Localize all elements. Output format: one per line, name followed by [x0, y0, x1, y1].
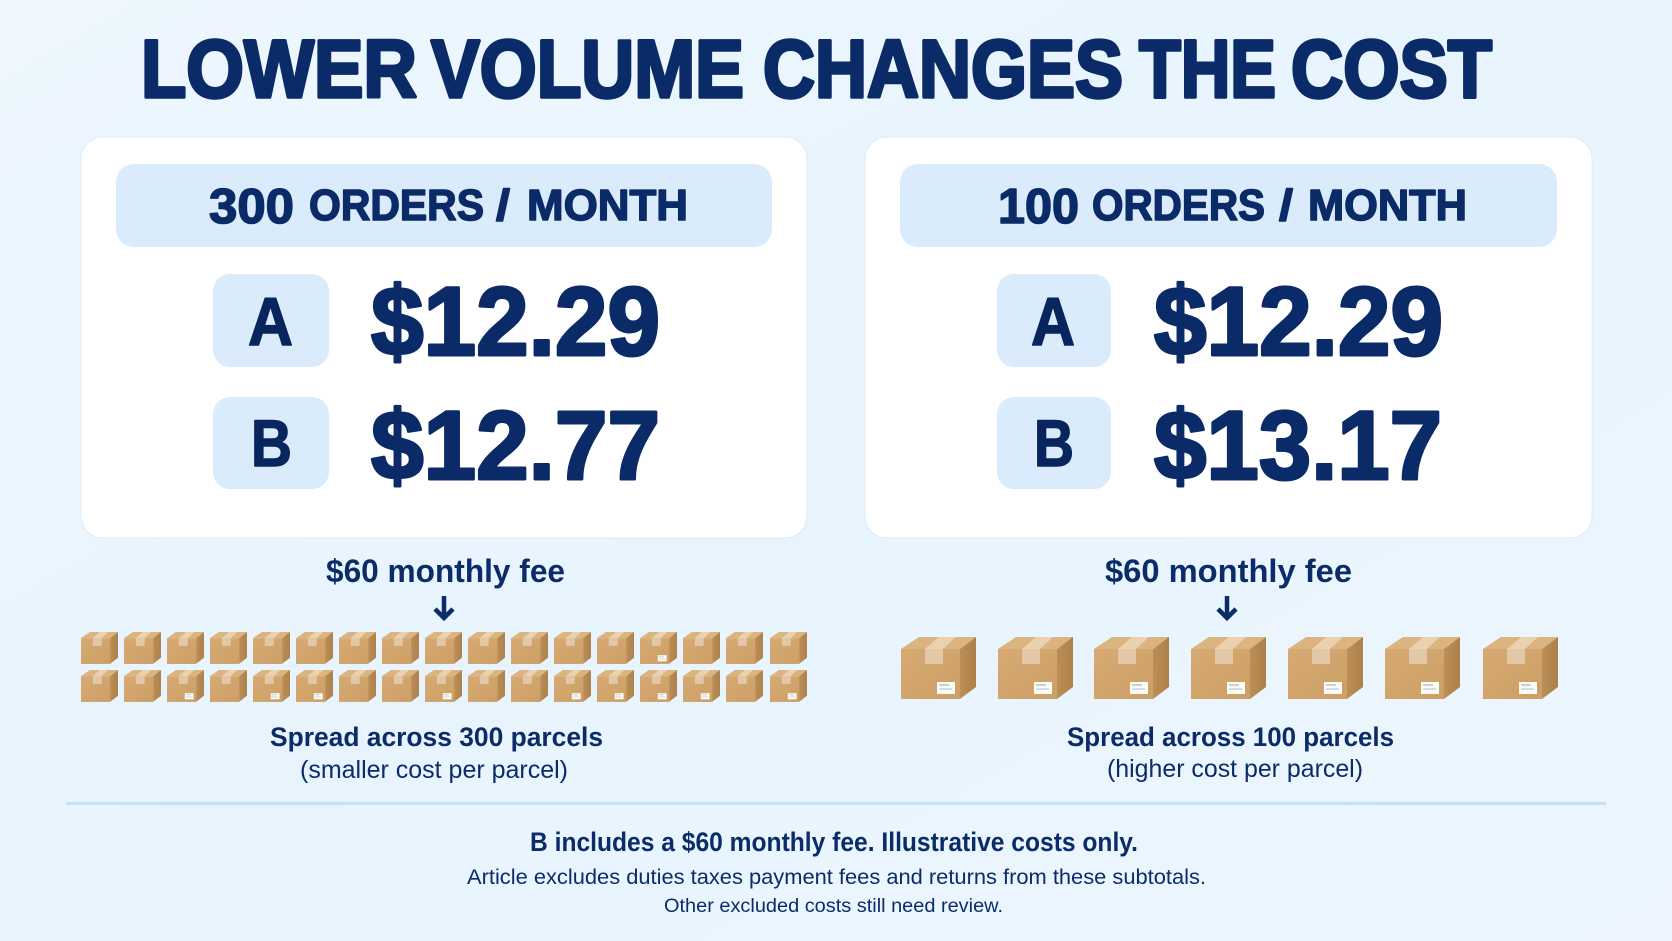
panel heading: 100 [998, 180, 1079, 234]
panel heading [900, 164, 1557, 247]
title: LOWER [141, 24, 417, 115]
parcels: 100 orders, 7 large boxes [901, 637, 1558, 699]
card background [81, 137, 807, 538]
panel heading: ORDERS [309, 181, 484, 230]
spread caption right: Spread across 100 parcels [1067, 722, 1394, 752]
title: CHANGES [763, 24, 1123, 115]
option B price: $13.17 [1154, 391, 1442, 500]
spread caption left: (smaller cost per parcel) [300, 756, 568, 784]
spread caption left [270, 722, 603, 784]
footnote: B includes a $60 monthly fee. Illustrative costs only. [530, 827, 1138, 857]
title: VOLUME [431, 24, 744, 115]
spread caption left: Spread across 300 parcels [270, 722, 603, 752]
title: THE [1139, 24, 1276, 115]
title: COST [1291, 24, 1492, 115]
option A badge: A [1031, 284, 1075, 360]
panel: 300 orders per month [81, 137, 807, 538]
spread caption right [1067, 722, 1394, 783]
parcels: 300 orders, 2 rows of small boxes [81, 632, 807, 702]
footnote: Article excludes duties taxes payment fees and returns from these subtotals. [467, 866, 1206, 889]
panel heading: / [1279, 181, 1293, 230]
card background [865, 137, 1592, 538]
footnote: Other excluded costs still need review. [664, 895, 1003, 917]
option A badge: A [248, 284, 293, 360]
arrow right [1218, 596, 1236, 618]
footnote [467, 827, 1206, 917]
option A badge [997, 274, 1111, 367]
fee label right: $60 monthly fee [1105, 553, 1352, 589]
arrow left [435, 596, 453, 618]
spread caption right: (higher cost per parcel) [1107, 755, 1363, 783]
option B badge [997, 397, 1111, 489]
panel heading: / [496, 181, 510, 230]
panel heading [116, 164, 772, 247]
fee label left: $60 monthly fee [326, 553, 565, 589]
panel heading: MONTH [527, 181, 688, 230]
panel heading: 300 [209, 180, 294, 234]
option A price: $12.29 [1154, 267, 1443, 376]
option B badge: B [251, 406, 292, 480]
option B badge: B [1034, 406, 1074, 480]
option B badge [213, 397, 329, 489]
option B price: $12.77 [371, 391, 660, 500]
panel heading: MONTH [1308, 181, 1467, 230]
panel heading: ORDERS [1092, 181, 1265, 230]
panel: 100 orders per month [865, 137, 1592, 538]
option A price: $12.29 [371, 267, 660, 376]
option A badge [213, 274, 329, 367]
